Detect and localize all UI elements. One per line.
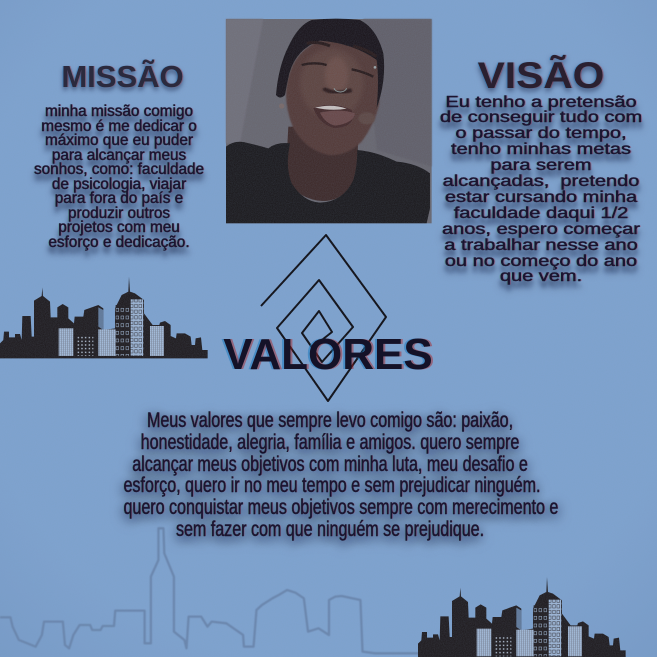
neck (286, 127, 358, 201)
face (286, 40, 379, 155)
skyline left (0, 277, 208, 358)
text: valores: esforço, quero ir no meu tempo e sem prejudicar ninguém. (123, 474, 540, 497)
text: valores: sem fazer com que ninguém se prejudique. (176, 518, 484, 541)
text: visão: anos, espero começar (442, 221, 640, 238)
text: visão: de conseguir tudo com (440, 109, 642, 126)
text: valores: honestidade, alegria, família e amigos. quero sempre (141, 431, 519, 454)
text: visão: que vem. (500, 268, 582, 285)
text: missão: para alcançar meus (52, 147, 186, 164)
text: missão (32, 103, 206, 260)
photo portrait (226, 19, 432, 223)
text: missão: esforço e dedicação. (48, 234, 190, 251)
text: missão: mesmo é me dedicar o (41, 118, 197, 135)
text: visão: o passar do tempo, (455, 125, 627, 142)
beanie (276, 19, 384, 108)
text: missão: produzir outros (68, 205, 170, 222)
text: missão: minha missão comigo (45, 103, 193, 120)
text: visão: ou no começo do ano (445, 253, 637, 270)
text: valores (117, 409, 564, 550)
text: missão: máximo que eu puder (45, 132, 193, 149)
heading: missão: MISSÃO (61, 59, 184, 94)
text: valores: alcançar meus objetivos com minha luta, meu desafio e (132, 453, 528, 476)
skyline right (418, 577, 626, 657)
outline skyline (0, 528, 419, 653)
text: missão: projetos com meu (58, 219, 180, 236)
text: valores: quero conquistar meus objetivos sempre com merecimento e (123, 496, 558, 519)
text: missão: para fora do país e (55, 190, 183, 207)
text: visão (437, 94, 644, 294)
text: missão: de psicologia, viajar (52, 176, 186, 193)
text: visão: a trabalhar nesse ano (444, 237, 638, 254)
text: visão: Eu tenho a pretensão (445, 94, 637, 110)
text: visão: alcançadas, pretendo (443, 173, 639, 190)
text: visão: tenho minhas metas (451, 141, 631, 158)
text: visão: estar cursando minha (445, 189, 637, 206)
text: valores: Meus valores que sempre levo comigo são: paixão, (147, 409, 513, 432)
heading: visão: VISÃO (478, 55, 604, 96)
text: missão: sonhos, como: faculdade (34, 161, 204, 178)
spiral diamond line drawing (261, 235, 386, 401)
heading: valores: VALORES (223, 330, 433, 379)
text: visão: para serem (490, 157, 592, 174)
shirt (226, 142, 430, 223)
text: visão: faculdade daqui 1/2 (454, 205, 628, 222)
